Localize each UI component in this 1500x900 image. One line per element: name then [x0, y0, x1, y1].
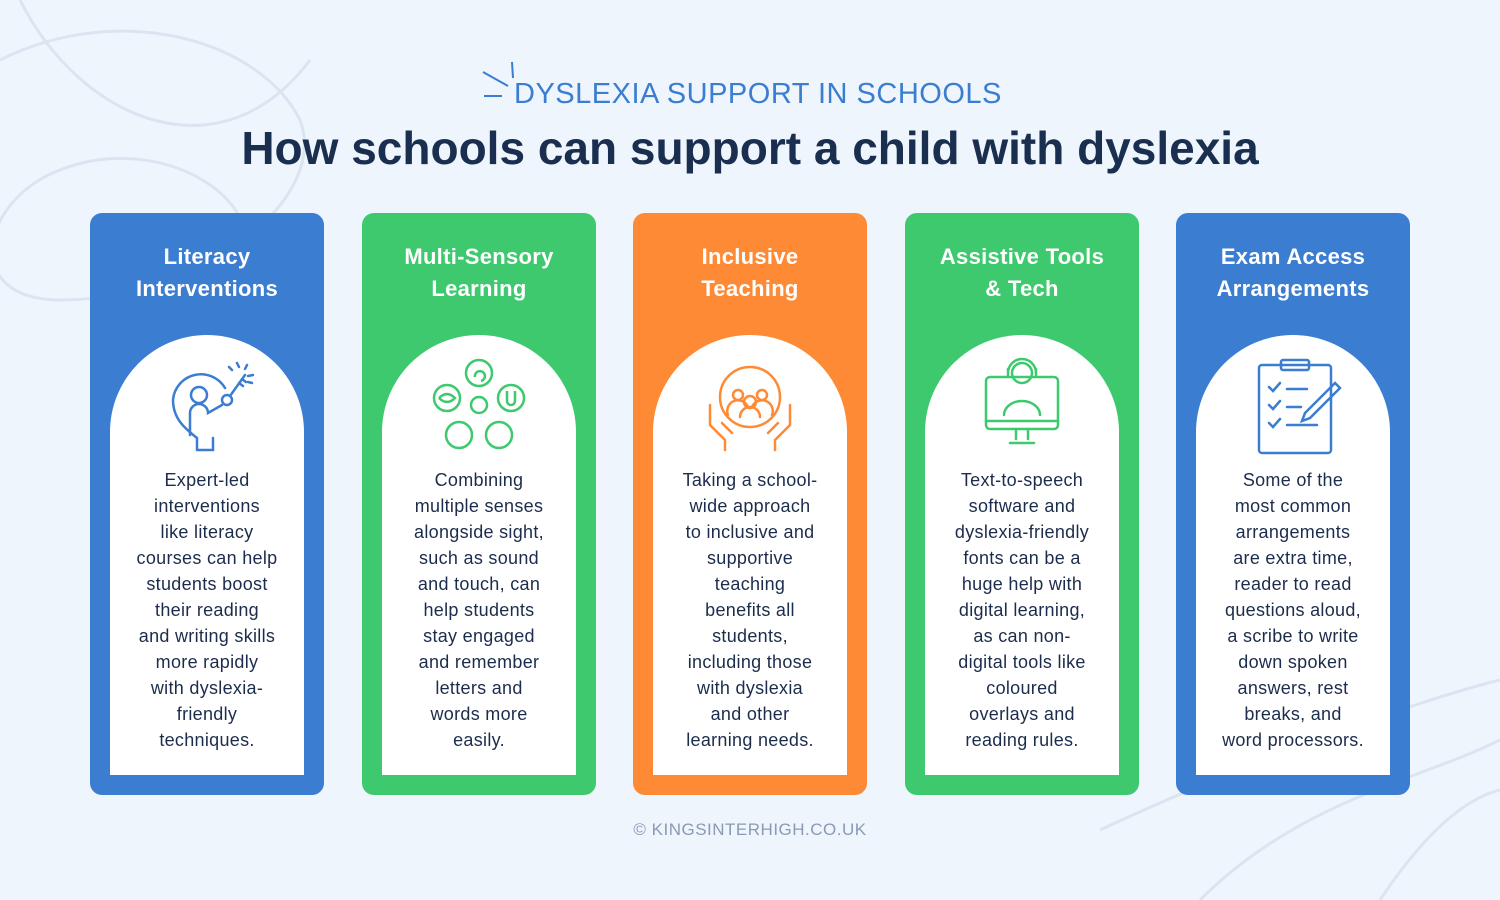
footer credit: © KINGSINTERHIGH.CO.UK [633, 820, 867, 839]
text: techniques. [159, 730, 255, 750]
text: software and [969, 496, 1075, 516]
text: digital tools like [958, 652, 1086, 672]
subtitle: DYSLEXIA SUPPORT IN SCHOOLS [514, 78, 1002, 110]
text: questions aloud, [1225, 600, 1361, 620]
card: inclusive: Teaching [701, 276, 799, 301]
text: digital learning, [959, 600, 1085, 620]
text: overlays and [969, 704, 1075, 724]
text: to inclusive and [686, 522, 814, 542]
text: like literacy [161, 522, 253, 542]
text: and writing skills [139, 626, 275, 646]
text: interventions [154, 496, 260, 516]
text: including those [688, 652, 812, 672]
text: such as sound [419, 548, 539, 568]
text: reader to read [1234, 574, 1352, 594]
card: exam: Exam Access [1221, 244, 1365, 269]
text: are extra time, [1233, 548, 1353, 568]
text: and remember [419, 652, 539, 672]
card: assistive: & Tech [985, 276, 1059, 301]
text [955, 470, 1089, 750]
text: benefits all [705, 600, 795, 620]
icon: senses [432, 358, 526, 450]
icon: lightbulb key [172, 362, 254, 452]
text: friendly [177, 704, 237, 724]
text [1222, 470, 1364, 750]
icon: monitor headset [984, 358, 1060, 444]
title: How schools can support a child with dyslexia [241, 122, 1259, 174]
card: multi-sensory: Learning [431, 276, 527, 301]
text: reading rules. [965, 730, 1079, 750]
text: coloured [986, 678, 1058, 698]
card: inclusive [633, 213, 867, 795]
text: learning needs. [686, 730, 814, 750]
card: literacy: Interventions [136, 276, 278, 301]
text [683, 470, 817, 750]
text: dyslexia-friendly [955, 522, 1089, 542]
text: help students [424, 600, 534, 620]
text: Text-to-speech [961, 470, 1083, 490]
text: breaks, and [1244, 704, 1342, 724]
text [137, 470, 277, 750]
text: wide approach [690, 496, 810, 516]
text: a scribe to write [1227, 626, 1359, 646]
text: answers, rest [1238, 678, 1348, 698]
text: as can non- [973, 626, 1071, 646]
text: letters and [435, 678, 523, 698]
text: Combining [435, 470, 523, 490]
card: exam: Arrangements [1217, 276, 1369, 301]
text: students, [712, 626, 788, 646]
card: inclusive: Inclusive [702, 244, 798, 269]
icon: clipboard checklist [1258, 358, 1342, 454]
text: easily. [453, 730, 505, 750]
subtitle [482, 62, 1002, 110]
text: with dyslexia [697, 678, 803, 698]
card: assistive: Assistive Tools [940, 244, 1104, 269]
text: arrangements [1236, 522, 1350, 542]
text [414, 470, 544, 750]
card: assistive [905, 213, 1139, 795]
text: down spoken [1238, 652, 1348, 672]
text: fonts can be a [963, 548, 1081, 568]
text: courses can help [137, 548, 277, 568]
text: most common [1235, 496, 1351, 516]
text: words more [430, 704, 528, 724]
text: and touch, can [418, 574, 540, 594]
text: their reading [155, 600, 259, 620]
text: teaching [715, 574, 785, 594]
text: alongside sight, [414, 522, 544, 542]
text: word processors. [1222, 730, 1364, 750]
icon: hands around people [708, 366, 792, 452]
text: students boost [146, 574, 268, 594]
text: and other [711, 704, 789, 724]
text: multiple senses [415, 496, 543, 516]
card: literacy [90, 213, 324, 795]
card: multi-sensory [362, 213, 596, 795]
text: huge help with [962, 574, 1082, 594]
text: supportive [707, 548, 793, 568]
text: more rapidly [156, 652, 258, 672]
card: multi-sensory: Multi-Sensory [404, 244, 554, 269]
text: Taking a school- [683, 470, 817, 490]
text: with dyslexia- [151, 678, 263, 698]
text: stay engaged [423, 626, 535, 646]
text: Some of the [1243, 470, 1343, 490]
text: Expert-led [164, 470, 250, 490]
card: literacy: Literacy [164, 244, 250, 269]
card: exam [1176, 213, 1410, 795]
